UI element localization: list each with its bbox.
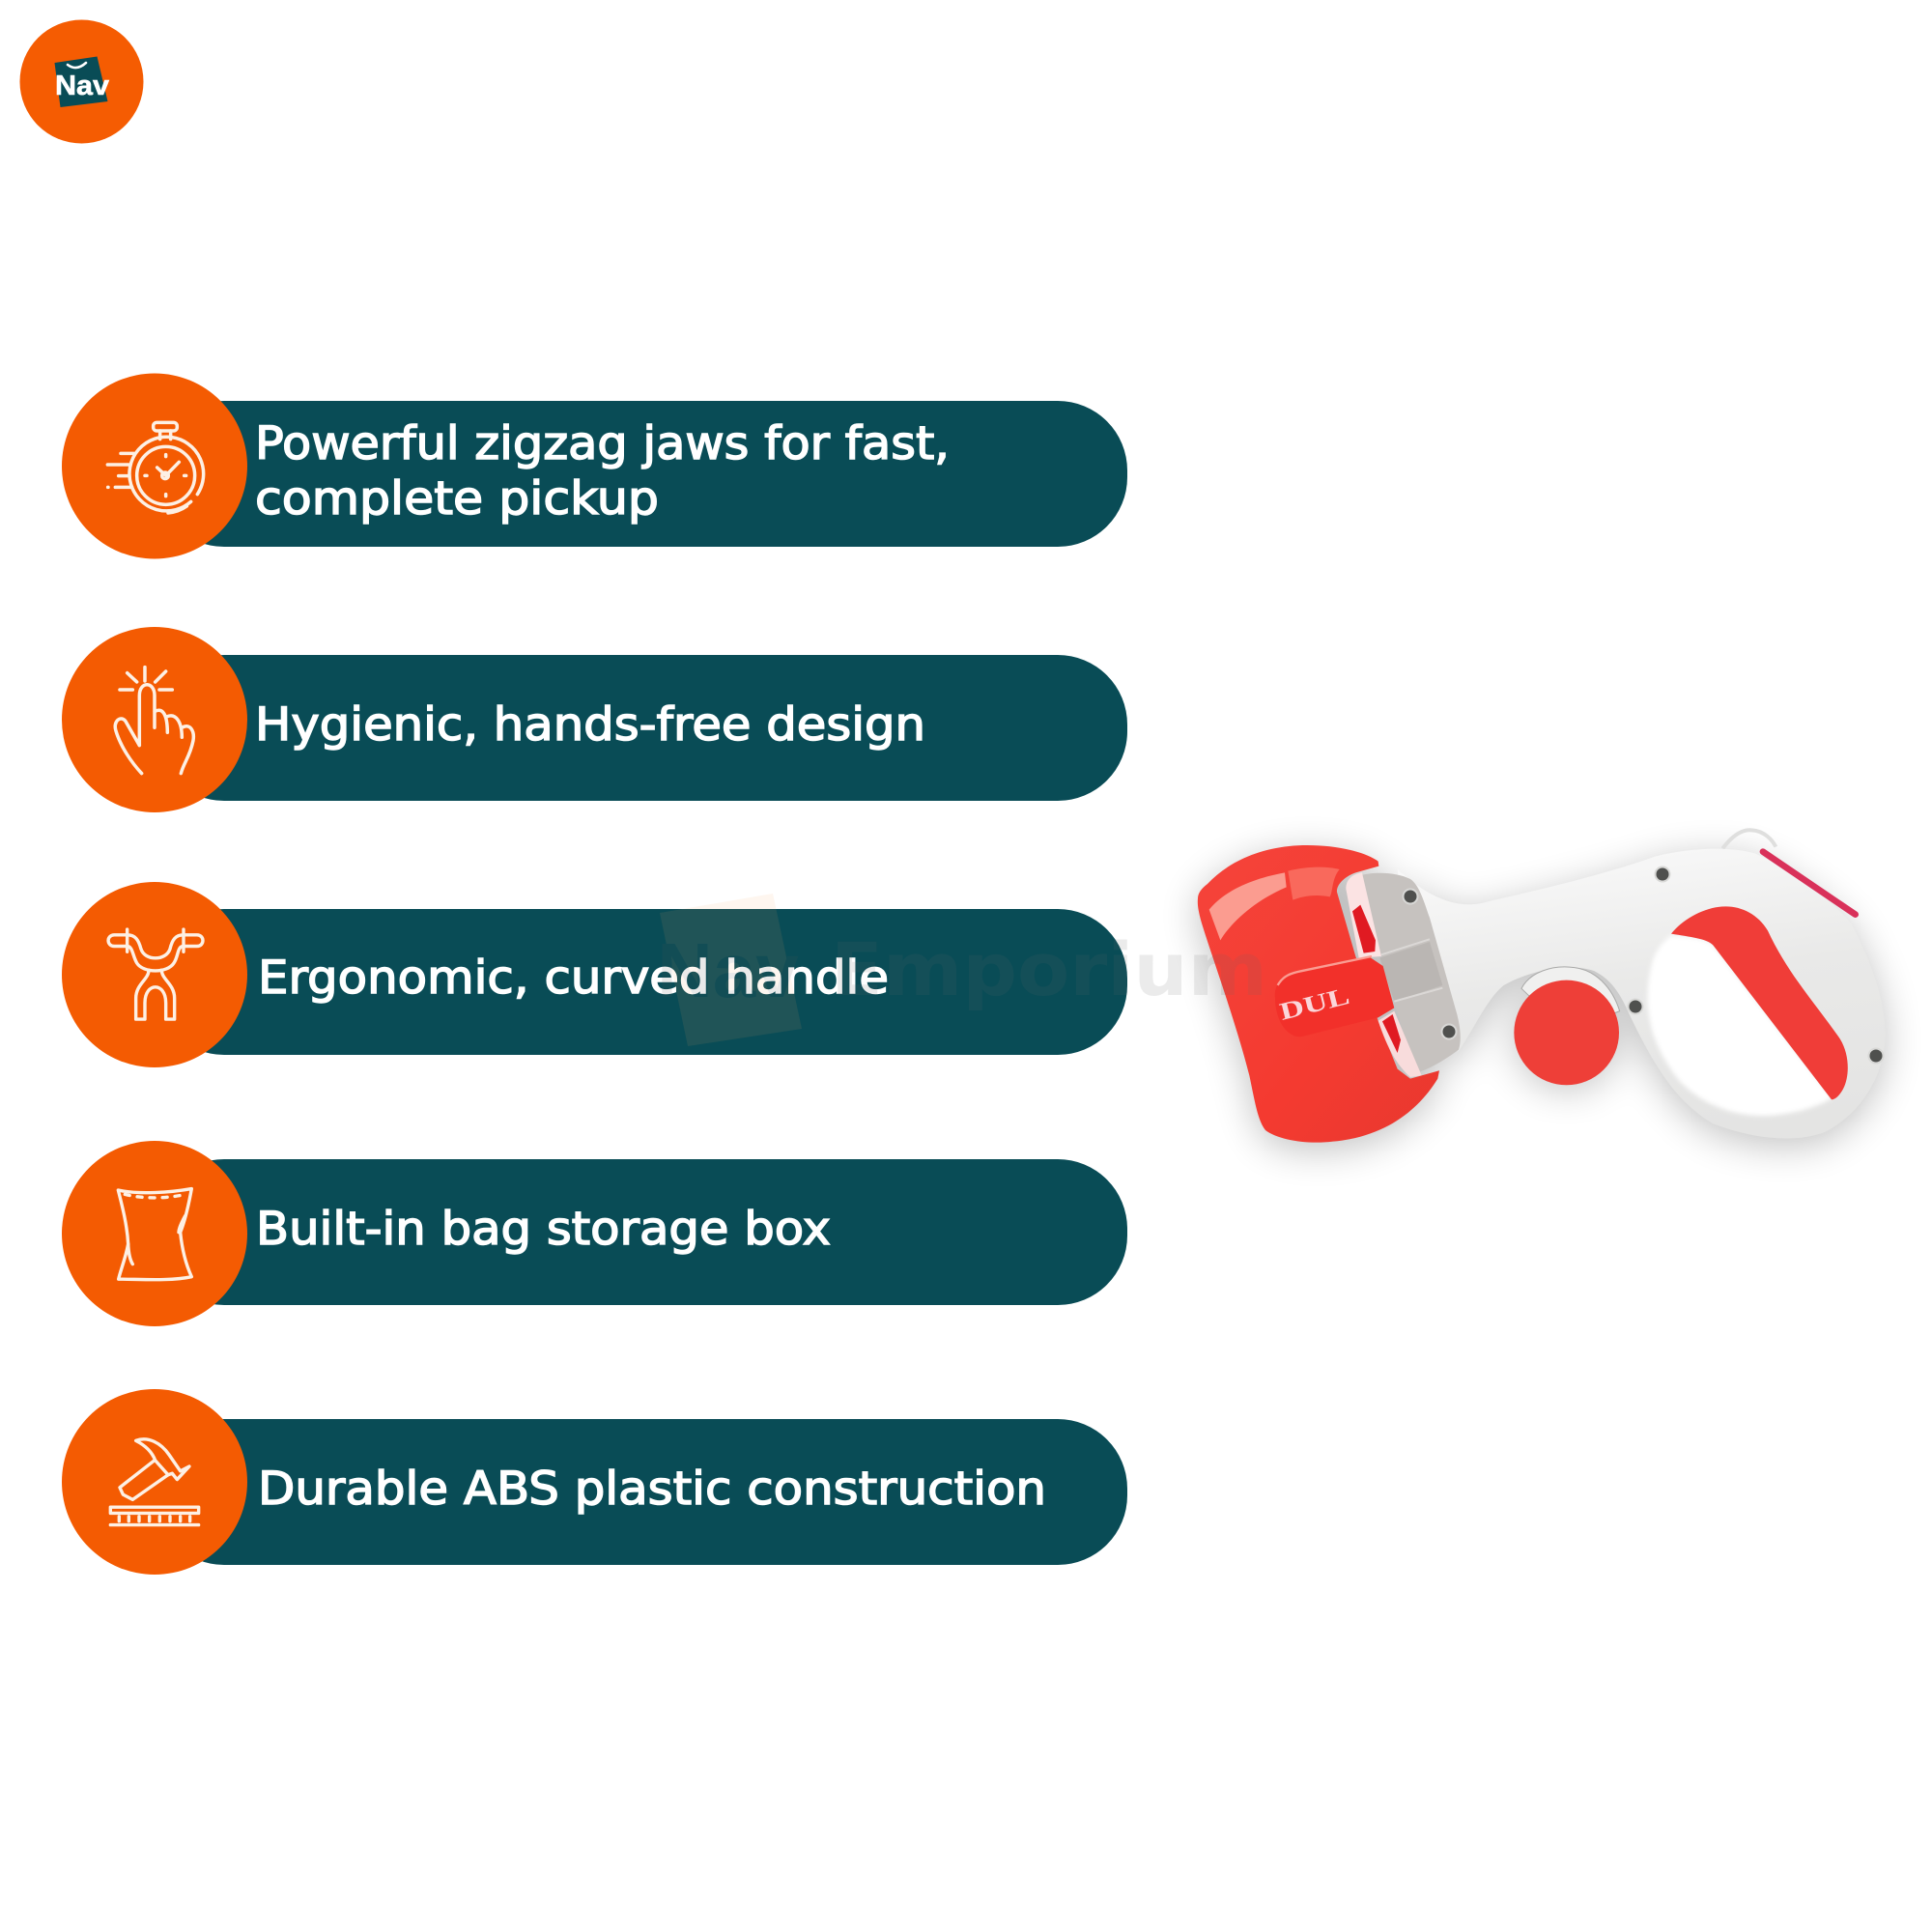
icon circle 3 xyxy=(62,882,247,1067)
screws xyxy=(1403,867,1884,1063)
icon: pointing hand xyxy=(115,668,193,774)
red grip xyxy=(1671,906,1848,1099)
pill 1 xyxy=(155,401,1127,547)
pill 4 xyxy=(155,1159,1127,1305)
casing highlights xyxy=(1209,872,1287,940)
icon circle 4 xyxy=(62,1141,247,1326)
pill 5 xyxy=(155,1419,1127,1565)
feature row 4: bag storage xyxy=(62,1141,1127,1326)
soft shadow xyxy=(1198,853,1886,1151)
icon circle 2 xyxy=(62,627,247,812)
carabiner ring xyxy=(1722,830,1776,848)
brand tag xyxy=(1275,956,1394,1037)
red round button xyxy=(1514,980,1619,1085)
pill 2 xyxy=(155,655,1127,801)
logo badge: Nav xyxy=(55,71,109,101)
text 1 xyxy=(255,417,950,526)
watermark: Nav Emporium xyxy=(657,894,1267,1046)
text 3: Ergonomic, curved handle xyxy=(258,952,889,1005)
pill 3 xyxy=(155,909,1127,1055)
icon circle 5 xyxy=(62,1389,247,1575)
feature row 2: hands-free xyxy=(62,627,1127,812)
text 5: Durable ABS plastic construction xyxy=(258,1463,1046,1516)
scooper head group xyxy=(1198,845,1461,1143)
feature row 3: ergonomic handle xyxy=(62,882,1127,1067)
icon: stopwatch xyxy=(107,422,204,513)
text 1: complete pickup xyxy=(255,472,659,526)
carabiner bar xyxy=(1763,852,1856,915)
brand tag: DUL xyxy=(1277,982,1352,1026)
product photo: pet waste scooper xyxy=(1198,830,1886,1151)
text 4: Built-in bag storage box xyxy=(256,1203,831,1256)
icon circle 1 xyxy=(62,373,247,558)
red head casing xyxy=(1198,845,1439,1143)
icon: hammer xyxy=(110,1439,199,1525)
text 1: Powerful zigzag jaws for fast, xyxy=(255,417,950,470)
handle opening xyxy=(1648,935,1833,1116)
watermark wordmark: Emporium xyxy=(831,926,1267,1012)
watermark logo block xyxy=(660,894,802,1046)
icon: curved handle xyxy=(108,929,203,1019)
text 2: Hygienic, hands-free design xyxy=(255,698,925,752)
lower chrome and slot xyxy=(1378,1011,1422,1077)
button collar xyxy=(1521,967,1620,1032)
upper chrome and slot xyxy=(1346,872,1381,958)
logo badge xyxy=(19,19,143,143)
handle and button group xyxy=(1398,830,1886,1139)
white handle body xyxy=(1398,849,1886,1139)
feature row 5: durable plastic xyxy=(62,1389,1127,1575)
feature row 1: fast pickup xyxy=(62,373,1127,558)
centre strap xyxy=(1379,942,1442,1002)
watermark: Nav Emporium: Nav xyxy=(657,927,799,1013)
icon: bag xyxy=(118,1189,191,1280)
grey jaw plate xyxy=(1359,873,1461,1072)
